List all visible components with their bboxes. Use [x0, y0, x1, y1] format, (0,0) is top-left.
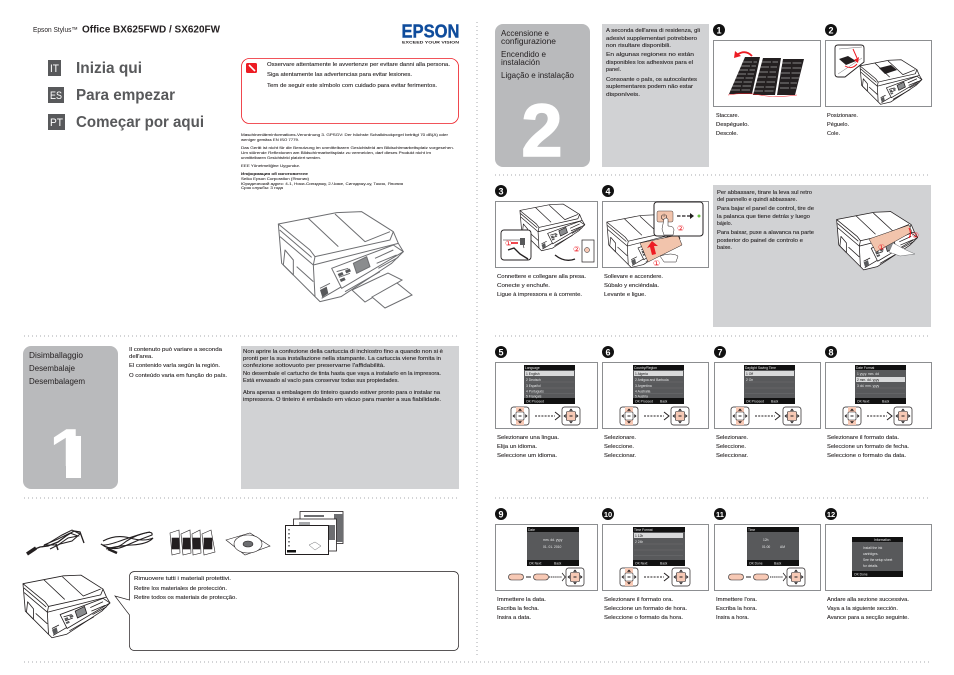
- note panel: stickers: non risultare disponibili.: [606, 43, 671, 49]
- icon: setup sheets: [286, 512, 343, 554]
- step 4: Sollevare e accendere.: [604, 274, 663, 280]
- note panel: stickers: A seconda dell'area di residenza, gli: [606, 28, 700, 34]
- panel: section 1 title: Desembalaje: [29, 364, 76, 373]
- Epson logo: EXCEED YOUR VISION: [402, 40, 459, 44]
- illustration: sticker sheet: [728, 51, 804, 96]
- step 1: 1: [716, 25, 722, 35]
- step 8: Selezionare il formato data.: [827, 435, 899, 441]
- printer illustration: [278, 212, 412, 308]
- step 8: [825, 346, 932, 459]
- LCD screen: country: 3 Argentina: [635, 384, 652, 388]
- LCD screen: time entry: Time: [748, 528, 755, 532]
- LCD screen: date entry: Back: [554, 562, 562, 566]
- step 12: Andare alla sezione successiva.: [827, 597, 909, 603]
- LCD screen: time entry: 12h: [763, 538, 769, 542]
- step 3: [495, 185, 598, 298]
- LCD screen: information: [852, 537, 903, 577]
- illustration: lift panel and power on: [607, 202, 703, 268]
- LCD screen: information: OK Done: [854, 572, 868, 576]
- header: product name: Epson Stylus™: [33, 25, 78, 34]
- language title: Italian: [48, 60, 142, 77]
- step 9: [495, 508, 598, 621]
- LCD screen: country: 4 Australia: [635, 390, 651, 394]
- LCD screen: information: See the setup sheet: [863, 558, 892, 562]
- keypad input icons: [508, 574, 548, 580]
- icon: phone cable: [101, 532, 153, 553]
- note panel: lowering the control panel: baixe.: [717, 245, 732, 251]
- step 7: Selezionare.: [716, 435, 748, 441]
- step 11: Insira a hora.: [716, 615, 749, 621]
- note panel: stickers: [602, 24, 709, 167]
- panel: section 2 title: Accensione e: [501, 29, 550, 38]
- icon: ink cartridges: [170, 530, 215, 555]
- step 11: Immettere l'ora.: [716, 597, 757, 603]
- LCD screen: date entry: Date: [528, 528, 535, 532]
- step 3: Ligue à impressora e à corrente.: [497, 292, 582, 298]
- text: contents note: O conteúdo varia em função do país.: [129, 373, 227, 379]
- step 9: 9: [498, 509, 504, 519]
- panel: section 2 title: Ligação e instalação: [501, 71, 575, 80]
- panel: section 2 title: configurazione: [501, 37, 557, 46]
- step 1: Descole.: [716, 131, 738, 137]
- step 10: [602, 508, 708, 621]
- LCD screen: date format: 3 dd. mm. yyyy: [857, 384, 880, 388]
- note panel: lowering the control panel: del pannello e quindi abbassare.: [717, 197, 797, 203]
- LCD screen: country: 5 Austria: [635, 394, 648, 398]
- note panel: lowering the control panel: posterior do painel de controlo e: [717, 238, 803, 244]
- LCD screen: date format: Back: [882, 400, 890, 404]
- panel: section 1 title: 1: [49, 415, 89, 495]
- note panel: ink cartridge: Está envasado al vacío para conservar todas sus propiedades.: [243, 378, 399, 384]
- LCD screen: date format: [855, 365, 906, 404]
- step 7: Seleccionar.: [716, 453, 748, 459]
- icon: warning: [246, 63, 257, 73]
- LCD screen: language: 5 Français: [526, 394, 542, 398]
- regulatory notes: Seiko Epson Corporation (Япония): [241, 176, 310, 181]
- warning box: Siga atentamente las advertencias para evitar lesiones.: [267, 72, 412, 78]
- regulatory notes: Срок службы: 3 года: [241, 185, 284, 190]
- LCD screen: country: 2 Antigua and Barbuda: [635, 378, 669, 382]
- step 7: [714, 346, 820, 459]
- step 5: Selezionare una lingua.: [497, 435, 559, 441]
- LCD screen: time format: 1 12h: [635, 534, 643, 538]
- illustration: printer with sticker inset: [835, 45, 922, 104]
- note panel: lowering the control panel: Para bajar el panel de control, tire de: [717, 206, 814, 212]
- keypad input icons: [728, 574, 768, 580]
- step 6: Seleccione.: [604, 444, 634, 450]
- note panel: stickers: panel.: [606, 67, 621, 73]
- panel: section 2 title: Encendido e: [501, 50, 547, 59]
- note panel: ink cartridge: Abra apenas a embalagem do tinteiro quando estiver pronto para o instalar na: [243, 390, 441, 396]
- note panel: ink cartridge: No desembale el cartucho de tinta hasta que vaya a instalarlo en la impresora.: [243, 371, 441, 377]
- step 5: 5: [498, 347, 504, 357]
- LCD screen: time entry: OK Done: [749, 562, 763, 566]
- regulatory notes: [241, 132, 454, 190]
- LCD screen: information: cartridges.: [863, 552, 878, 556]
- LCD screen: date format: 2 mm. dd. yyyy: [857, 378, 880, 382]
- language title: Italian: Inizia qui: [76, 60, 142, 77]
- icon: power cable: [27, 530, 84, 554]
- note panel: lowering the control panel: Per abbassare, tirare la leva sul retro: [717, 190, 812, 196]
- regulatory notes: Das Gerät ist nicht für die Benutzung im unmittelbaren Gesichtsfeld am Bildschirmarbeitsplatz vorgesehen.: [241, 145, 454, 150]
- step 9: Insira a data.: [497, 615, 531, 621]
- LCD screen: country: Back: [660, 400, 668, 404]
- step 2: 2: [828, 25, 834, 35]
- regulatory notes: Um störende Reflexionen am Bildschirmarbeitsplatz zu vermeiden, darf dieses Produkt nicht im: [241, 150, 432, 155]
- step 3: Connettere e collegare alla presa.: [497, 274, 586, 280]
- LCD screen: daylight saving: OK Proceed: [746, 400, 764, 404]
- step 5: [495, 346, 598, 459]
- callout: remove protective materials: Retire los materiales de protección.: [134, 586, 227, 592]
- LCD screen: date format: Date Format: [856, 366, 874, 370]
- step 10: Selezionare il formato ora.: [604, 597, 673, 603]
- note panel: stickers: disponíveis.: [606, 92, 641, 98]
- regulatory notes: unmittelbaren Gesichtsfeld platziert werden.: [241, 155, 321, 160]
- step 10: 10: [604, 510, 612, 519]
- step 1: [713, 24, 820, 137]
- step 12: Vaya a la siguiente sección.: [827, 606, 898, 612]
- language title: Portuguese: Começar por aqui: [76, 114, 204, 131]
- LCD screen: daylight saving: 2 On: [746, 378, 753, 382]
- LCD screen: daylight saving: Back: [771, 400, 779, 404]
- note panel: stickers: Consoante o país, os autocolantes: [606, 77, 697, 83]
- text: contents note: [129, 347, 227, 379]
- panel: section 1 title: [23, 346, 118, 495]
- LCD screen: language: 4 Português: [526, 390, 544, 394]
- step 10: Seleccione o formato da hora.: [604, 615, 683, 621]
- Epson logo: EPSON: [402, 20, 460, 42]
- note panel: ink cartridge: confezione sottovuoto per preservarne l'affidabilità.: [243, 363, 386, 369]
- note panel: stickers: disponibles los adhesivos para el: [606, 60, 693, 66]
- step 2: Posizionare.: [827, 113, 858, 119]
- text: contents note: Il contenuto può variare a seconda: [129, 347, 223, 353]
- LCD screen: daylight saving: [744, 365, 795, 404]
- step 11: 11: [716, 510, 724, 519]
- LCD screen: date entry: OK Next: [529, 562, 542, 566]
- note panel: ink cartridge: pronti per la sua installazione nella stampante. La cartuccia viene fornita in: [243, 356, 441, 362]
- panel: section 1 title: Desembalagem: [29, 377, 85, 386]
- language title: Portuguese: PT: [50, 117, 63, 129]
- step 4: Levante e ligue.: [604, 292, 646, 298]
- panel: section 1 title: Disimballaggio: [29, 351, 84, 360]
- step 5: Seleccione um idioma.: [497, 453, 557, 459]
- step 1: Staccare.: [716, 113, 739, 119]
- note panel: lowering the control panel: [713, 185, 931, 327]
- step 3: Conecte y enchufe.: [497, 283, 550, 289]
- text: contents note: dell'area.: [129, 354, 153, 360]
- step 6: [602, 346, 708, 459]
- LCD screen: date entry: [527, 527, 579, 566]
- warning box: [242, 58, 458, 124]
- step 7: 7: [717, 347, 723, 357]
- header: product name: Office BX625FWD / SX620FW: [82, 24, 220, 36]
- note panel: ink cartridge: impressora. O tinteiro é embalado em vácuo para manter a sua fiabilidade.: [243, 397, 441, 403]
- step 2: Péguelo.: [827, 122, 849, 128]
- note panel: stickers: En algunas regiones no están: [606, 52, 694, 58]
- regulatory notes: weniger gemäss EN ISO 7779.: [241, 137, 299, 142]
- LCD screen: language: [524, 365, 575, 404]
- step 9: Immettere la data.: [497, 597, 546, 603]
- LCD screen: language: 2 Deutsch: [526, 378, 541, 382]
- step 3: 3: [498, 186, 504, 196]
- illustration: printer with lowered panel: [837, 212, 919, 270]
- step 8: Seleccione un formato de fecha.: [827, 444, 909, 450]
- LCD screen: date entry: 01. 01. 2010: [543, 545, 561, 549]
- LCD screen: date entry: mm. dd. yyyy: [543, 538, 563, 542]
- note panel: lowering the control panel: bájelo.: [717, 221, 732, 227]
- LCD screen: country: [633, 365, 684, 404]
- language title: Spanish: Para empezar: [76, 87, 175, 104]
- illustration: printer with lowered panel: ②: [912, 231, 919, 240]
- LCD screen: country: Country/Region: [634, 366, 657, 370]
- panel: section 2 title: 2: [521, 89, 563, 172]
- LCD screen: time format: Back: [660, 562, 668, 566]
- LCD screen: time format: OK Next: [635, 562, 648, 566]
- printer illustration: unpacking: [23, 575, 110, 638]
- note panel: stickers: suplementares podem não estar: [606, 84, 693, 90]
- LCD screen: country: OK Proceed: [635, 400, 653, 404]
- step 9: Escriba la fecha.: [497, 606, 539, 612]
- LCD screen: daylight saving: 1 Off: [746, 372, 753, 376]
- step 4: Súbalo y enciéndala.: [604, 283, 659, 289]
- step 8: 8: [828, 347, 834, 357]
- warning box: Tem de seguir este símbolo com cuidado para evitar ferimentos.: [267, 83, 437, 89]
- illustration: power connection: ②: [573, 245, 580, 254]
- illustration: lift panel and power on: ⏻: [661, 213, 668, 222]
- LCD screen: daylight saving: Daylight Saving Time: [745, 366, 776, 370]
- step 11: Escriba la hora.: [716, 606, 757, 612]
- icon: CD: [226, 533, 270, 555]
- step 7: Seleccione.: [716, 444, 746, 450]
- illustration: lift panel and power on: ②: [677, 224, 684, 233]
- LCD screen: time format: 2 24h: [635, 540, 643, 544]
- LCD screen: language: OK Proceed: [526, 400, 544, 404]
- illustration: power connection: [501, 204, 594, 262]
- step 2: Cole.: [827, 131, 840, 137]
- regulatory notes: EEE Yönetmeliğine Uygundur.: [241, 163, 300, 168]
- callout: remove protective materials: [115, 572, 458, 650]
- step 8: Seleccione o formato da data.: [827, 453, 906, 459]
- LCD screen: information: for details.: [863, 564, 878, 568]
- LCD screen: country: 1 Algeria: [635, 372, 648, 376]
- LCD screen: time format: Time Format: [634, 528, 653, 532]
- step 6: Seleccionar.: [604, 453, 636, 459]
- step 6: Selezionare.: [604, 435, 636, 441]
- LCD screen: date format: OK Next: [857, 400, 870, 404]
- step 5: Elija un idioma.: [497, 444, 537, 450]
- callout: remove protective materials: Rimuovere tutti i materiali protettivi.: [134, 576, 231, 582]
- step 11: [714, 508, 820, 621]
- LCD screen: date format: 1 yyyy. mm. dd: [857, 372, 879, 376]
- step 4: [602, 185, 708, 298]
- LCD screen: time entry: Back: [774, 562, 782, 566]
- language title: Spanish: ES: [50, 90, 62, 102]
- illustration: power connection: ①: [505, 239, 512, 248]
- step 2: [825, 24, 932, 137]
- note panel: stickers: adesivi supplementari potrebbero: [606, 36, 697, 42]
- callout: remove protective materials: Retire todos os materiais de protecção.: [134, 595, 237, 601]
- regulatory notes: Информация об изготовителе: [241, 171, 309, 176]
- LCD screen: language: 1 English: [526, 372, 540, 376]
- LCD screen: language: Language: [525, 366, 540, 370]
- LCD screen: time format: [633, 527, 685, 566]
- step 6: 6: [605, 347, 611, 357]
- LCD screen: time entry: AM: [780, 545, 785, 549]
- text: contents note: El contenido varía según la región.: [129, 363, 220, 369]
- step 4: 4: [605, 186, 611, 196]
- illustration: lift panel and power on: ①: [653, 259, 660, 268]
- regulatory notes: Юридический адрес: 4-1, Ниси-Синздюку, 2-Чоме, Синздюку-ку, Токио, Япония: [241, 181, 403, 186]
- step 1: Despéguelo.: [716, 122, 749, 128]
- note panel: lowering the control panel: Para baixar, puxe a alavanca na parte: [717, 230, 814, 236]
- step 10: Seleccione un formato de hora.: [604, 606, 687, 612]
- warning box: Osservare attentamente le avvertenze per evitare danni alla persona.: [267, 62, 450, 68]
- step 12: 12: [827, 510, 835, 519]
- LCD screen: information: Information: [874, 538, 891, 542]
- LCD screen: time entry: 01:00: [762, 545, 770, 549]
- language title: Italian: IT: [50, 63, 59, 75]
- LCD screen: information: Install the ink: [863, 546, 883, 550]
- note panel: ink cartridge: Non aprire la confezione della cartuccia di inchiostro fino a quando non si è: [243, 349, 443, 355]
- regulatory notes: Maschinenlärminformations-Verordnung 3. GPSGV: Der höchste Schalldruckpegel beträgt 70 dB(A) oder: [241, 132, 449, 137]
- panel: section 2 title: [495, 24, 590, 172]
- step 12: Avance para a secção seguinte.: [827, 615, 909, 621]
- panel: section 2 title: instalación: [501, 58, 540, 67]
- LCD screen: time entry: [747, 527, 799, 566]
- step 12: [825, 508, 932, 621]
- note panel: ink cartridge: [241, 346, 459, 489]
- LCD screen: language: 3 Español: [526, 384, 541, 388]
- note panel: lowering the control panel: la palanca que tiene detrás y luego: [717, 214, 810, 220]
- illustration: printer with lowered panel: ①: [878, 243, 885, 252]
